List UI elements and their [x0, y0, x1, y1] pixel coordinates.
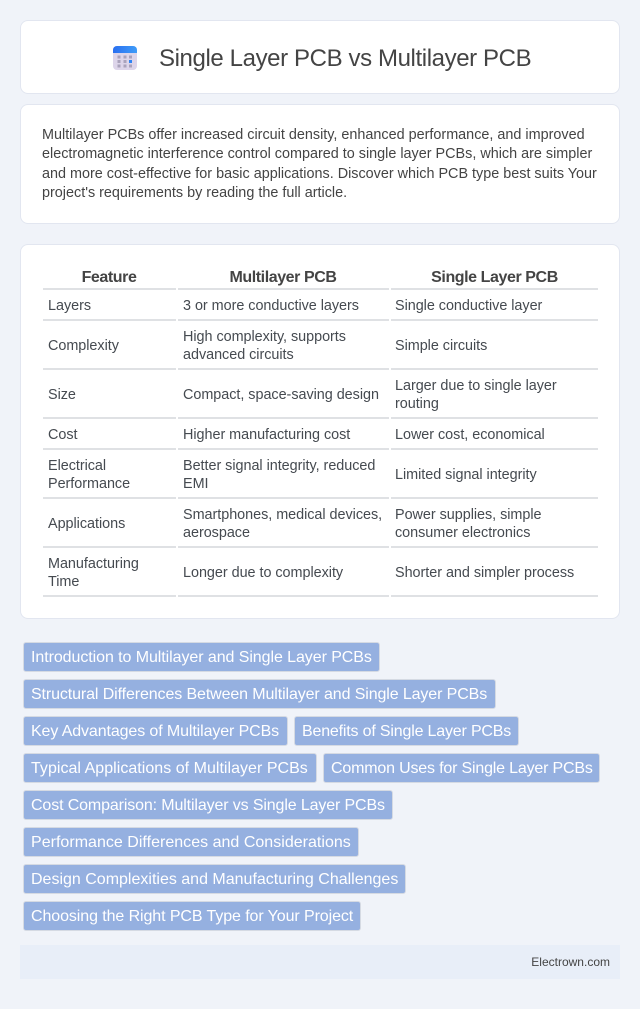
- title: Single Layer PCB vs Multilayer PCB: [159, 45, 531, 72]
- intro text: and more cost-effective for basic applications. Discover which PCB type best suits Your: [42, 166, 597, 182]
- title panel: [20, 20, 620, 94]
- comparison table panel: [20, 244, 620, 619]
- footer source: Electrown.com: [531, 955, 610, 969]
- topic tags: [23, 642, 600, 931]
- intro text: electromagnetic interference control compared to single layer PCBs, which are simpler: [42, 146, 592, 162]
- row: manufacturing time: [48, 556, 139, 590]
- comparison table panel: Larger due to single layer: [395, 378, 557, 394]
- tag: Common Uses for Single Layer PCBs: [331, 760, 593, 777]
- intro panel: [20, 104, 620, 224]
- comparison table panel: advanced circuits: [183, 347, 294, 363]
- comparison table panel: routing: [395, 396, 439, 412]
- tag: Introduction to Multilayer and Single Layer PCBs: [31, 649, 372, 666]
- comparison table panel: 3 or more conductive layers: [183, 298, 359, 314]
- tag: [323, 753, 600, 783]
- row: electrical performance: Performance: [48, 476, 130, 492]
- comparison table panel: Longer due to complexity: [183, 565, 343, 581]
- footer bar: [20, 945, 620, 979]
- icon: calendar grid: [113, 46, 137, 70]
- row: complexity: Complexity: [48, 338, 119, 354]
- row: size: Size: [48, 387, 76, 403]
- tag: [23, 642, 380, 672]
- intro text: project's requirements by reading the full article.: [42, 185, 347, 201]
- table header: Feature: [82, 269, 136, 286]
- tag: Design Complexities and Manufacturing Challenges: [31, 871, 398, 888]
- comparison table panel: High complexity, supports: [183, 329, 346, 345]
- tag: [294, 716, 519, 746]
- row: manufacturing time: Time: [48, 574, 79, 590]
- tag: [23, 901, 361, 931]
- comparison table panel: Better signal integrity, reduced: [183, 458, 375, 474]
- tag: Choosing the Right PCB Type for Your Project: [31, 908, 353, 925]
- table header: [82, 269, 558, 286]
- row: cost: Cost: [48, 427, 77, 443]
- tag: [23, 790, 393, 820]
- row: electrical performance: Electrical: [48, 458, 106, 474]
- tag: [23, 753, 317, 783]
- comparison table panel: aerospace: [183, 525, 250, 541]
- tag: Performance Differences and Considerations: [31, 834, 351, 851]
- row: applications: Applications: [48, 516, 125, 532]
- tag: [23, 679, 496, 709]
- tag: [23, 827, 359, 857]
- comparison table panel: Higher manufacturing cost: [183, 427, 350, 443]
- comparison table panel: Shorter and simpler process: [395, 565, 574, 581]
- row: manufacturing time: Manufacturing: [48, 556, 139, 572]
- comparison table panel: Compact, space-saving design: [183, 387, 379, 403]
- intro text: [42, 127, 597, 201]
- table header: Multilayer PCB: [229, 269, 337, 286]
- comparison table panel: Smartphones, medical devices,: [183, 507, 382, 523]
- tag: Benefits of Single Layer PCBs: [302, 723, 511, 740]
- tag: Cost Comparison: Multilayer vs Single Layer PCBs: [31, 797, 385, 814]
- row: electrical performance: [48, 458, 130, 492]
- comparison table panel: Limited signal integrity: [395, 467, 537, 483]
- comparison table panel: Single conductive layer: [395, 298, 542, 314]
- tag: [23, 864, 406, 894]
- comparison table panel: Simple circuits: [395, 338, 487, 354]
- row: layers: Layers: [48, 298, 91, 314]
- tag: [23, 716, 288, 746]
- comparison table panel: EMI: [183, 476, 208, 492]
- comparison table panel: Power supplies, simple: [395, 507, 542, 523]
- tag: Key Advantages of Multilayer PCBs: [31, 723, 279, 740]
- tag: Typical Applications of Multilayer PCBs: [31, 760, 308, 777]
- comparison table panel: consumer electronics: [395, 525, 530, 541]
- table header: Single Layer PCB: [431, 269, 558, 286]
- comparison table panel: Lower cost, economical: [395, 427, 545, 443]
- tag: Structural Differences Between Multilayer and Single Layer PCBs: [31, 686, 487, 703]
- intro text: Multilayer PCBs offer increased circuit density, enhanced performance, and improved: [42, 127, 585, 143]
